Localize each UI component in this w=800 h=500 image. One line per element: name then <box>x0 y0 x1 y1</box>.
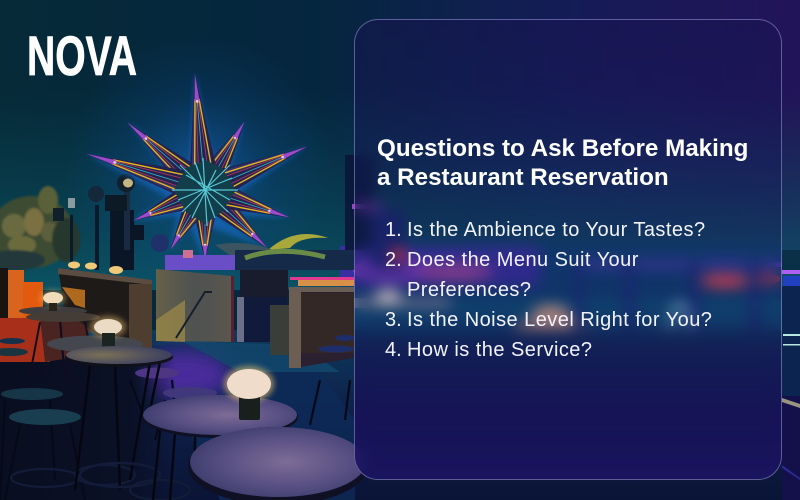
right booth <box>289 287 354 368</box>
numbered list <box>385 219 712 361</box>
lamp table <box>142 366 298 500</box>
concrete wall <box>156 269 234 342</box>
numbered list: 2. <box>385 249 402 271</box>
bar lamps <box>68 262 123 274</box>
terrace floor <box>0 330 782 500</box>
numbered list: How is the Service? <box>407 339 592 361</box>
stage spotlights <box>53 174 169 270</box>
heading <box>377 135 748 191</box>
far tables <box>19 290 100 380</box>
numbered list: Is the Noise Level Right for You? <box>407 309 712 331</box>
numbered list: 3. <box>385 309 402 331</box>
numbered list: Is the Ambience to Your Tastes? <box>407 219 706 241</box>
numbered list: Preferences? <box>407 279 531 301</box>
numbered list: Does the Menu Suit Your <box>407 249 639 271</box>
orange lit wall and floor <box>0 268 100 362</box>
palm fronds <box>215 234 328 262</box>
right edge city strip <box>782 250 800 500</box>
middle tables <box>47 316 173 490</box>
bar counter <box>58 268 152 350</box>
heading: a Restaurant Reservation <box>377 164 669 191</box>
heading: Questions to Ask Before Making <box>377 135 748 162</box>
numbered list: 1. <box>385 219 402 241</box>
numbered list: 4. <box>385 339 402 361</box>
trees <box>0 186 80 270</box>
background bright lights behind panel <box>340 155 782 500</box>
stools <box>0 335 355 500</box>
stage equipment and neon <box>165 250 355 355</box>
star sculpture <box>82 72 313 262</box>
front table <box>188 427 368 500</box>
panel: questions <box>354 19 782 480</box>
